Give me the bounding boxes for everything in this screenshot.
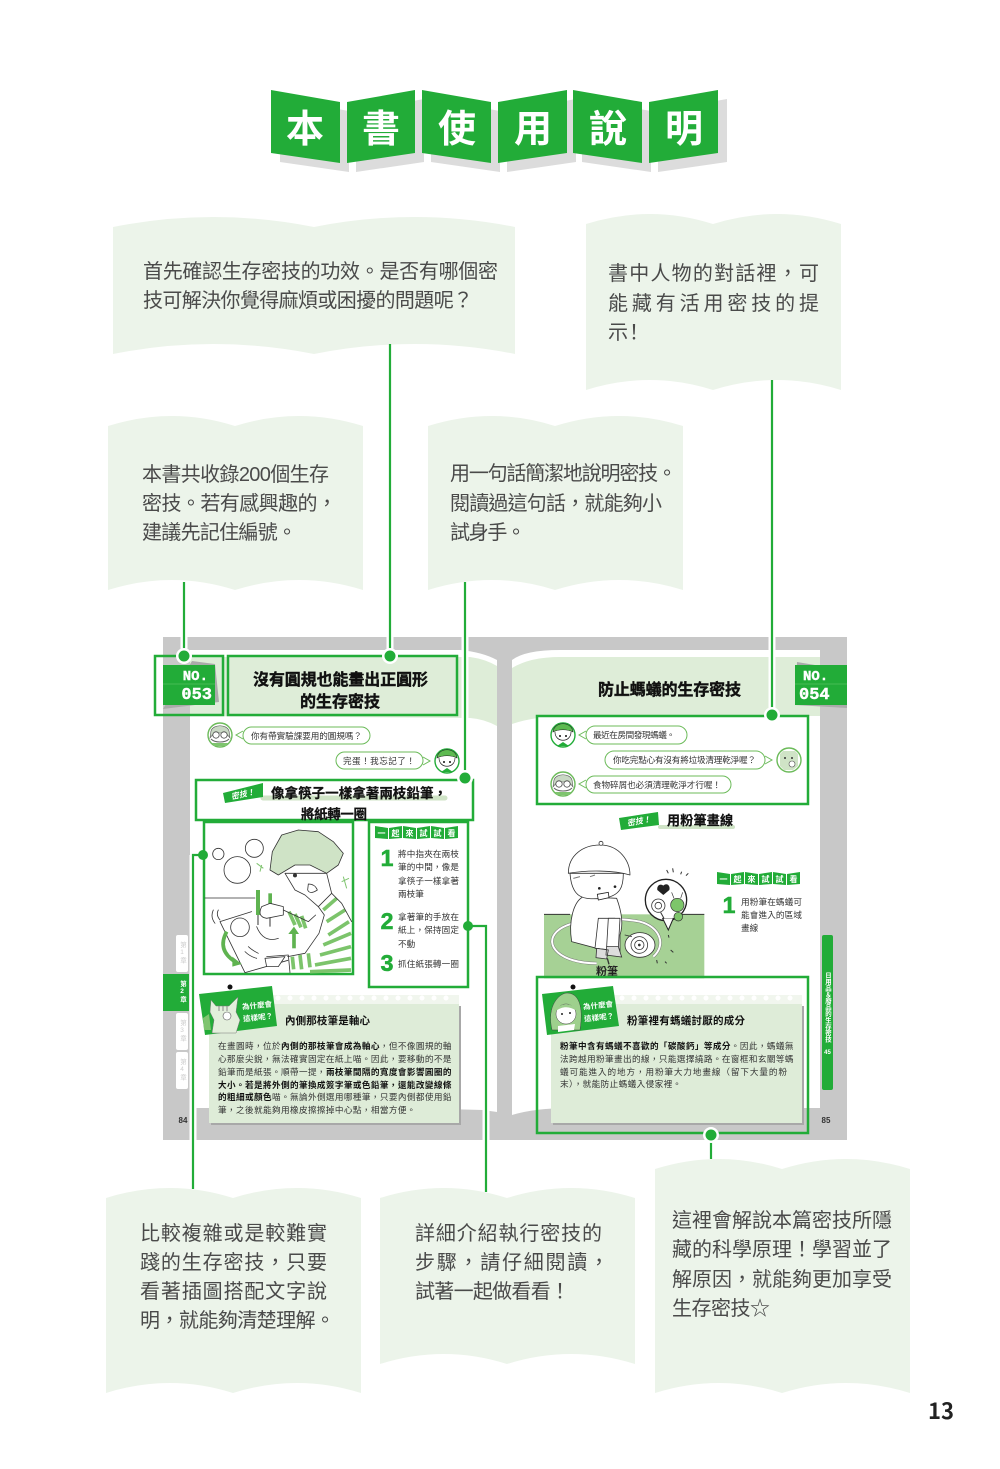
banner: try it together — [375, 826, 458, 839]
banner: try it together — [717, 872, 800, 885]
callout: illustrations explain difficult techniques: 看著插圖搭配文字說 — [140, 1280, 327, 1303]
avatar: professor — [551, 772, 575, 796]
note panel: left why: 內側那枝筆是軸心 — [285, 1014, 370, 1027]
callout: dialogue hints: 能藏有活用密技的提 — [608, 292, 819, 315]
speech bubble: 食物碎屑也必須清理乾淨才行喔！ — [593, 779, 721, 790]
side tab: right: 日用品＆廢品的生存密技 — [824, 972, 831, 1044]
callout: scientific principle: 生存密技☆ — [672, 1297, 770, 1320]
connector lines with dots — [176, 344, 780, 1192]
explanation highlight box: right why — [537, 977, 808, 1133]
banner: try it together: 試 — [762, 874, 770, 884]
speech bubble — [236, 727, 370, 744]
step 1: 1 — [381, 845, 394, 871]
title: 本書使用說明: 書 — [362, 109, 400, 151]
note panel: left why: 鉛筆而是紙張。順帶一提，兩枝筆間隔的寬度會影響圓圈的 — [218, 1066, 452, 1077]
steps: right: 能會進入的區域 — [741, 909, 802, 920]
chapter tabs: 第2章 — [178, 979, 187, 1004]
tag with girl: 為什麼會 — [583, 998, 614, 1012]
callout: 200 techniques numbering — [108, 416, 363, 590]
tag with cat — [199, 984, 277, 1035]
note panel: left why: 大小。若是將外側的筆換成簽字筆或色鉛筆，還能改變線條 — [218, 1079, 452, 1090]
left page number tag 053: NO. — [183, 669, 208, 685]
note panel: left why: 心那麼尖銳，無法確實固定在紙上喵。因此，要移動的不是 — [218, 1053, 452, 1064]
title: 本書使用說明 — [271, 90, 727, 172]
left page dialogue — [208, 723, 459, 773]
title: 本書使用說明: 說 — [589, 109, 627, 151]
step 2 — [381, 908, 459, 949]
step 3: 抓住紙張轉一圈 — [398, 958, 459, 969]
callout: scientific principle: 解原因，就能夠更加享受 — [672, 1268, 892, 1291]
chapter tabs: 第3章 — [178, 1018, 187, 1042]
callout: illustrations explain difficult techniques: 明，就能夠清楚理解。 — [140, 1309, 335, 1332]
title: 本書使用說明: 用 — [514, 109, 552, 151]
page number 13: 13 — [928, 1394, 954, 1426]
right page — [512, 650, 820, 1115]
connector: illustration — [193, 850, 208, 1189]
left page number tag 053: 053 — [181, 686, 212, 705]
banner: try it together: 來 — [748, 874, 756, 884]
callout: dialogue hints: 書中人物的對話裡，可 — [608, 262, 819, 285]
right technique headline — [619, 812, 733, 830]
illustration: drawing a circle with two pencils — [204, 822, 353, 974]
explanation highlight box: right why: 蟻可能進入的地方，用粉筆大力地畫線（留下大量的粉 — [560, 1066, 788, 1077]
speech bubble: 你吃完點心有沒有將垃圾清理乾淨喔？ — [613, 754, 756, 765]
open book spread — [155, 637, 847, 1140]
speech bubble — [605, 751, 772, 769]
callout: detailed steps: 詳細介紹執行密技的 — [415, 1222, 602, 1245]
tag with cat: 這樣呢？ — [243, 1010, 273, 1024]
connector: explanation — [703, 1127, 719, 1159]
note panel: left why: 在畫圓時，位於內側的那枝筆會成為軸心，但不像圓規的軸 — [218, 1040, 452, 1051]
callout: one-sentence summary: 閱讀過這句話，就能夠小 — [450, 492, 662, 515]
explanation highlight box: right why: 粉筆裡有螞蟻討厭的成分 — [627, 1014, 746, 1027]
callout: illustrations explain difficult techniques — [106, 1188, 361, 1393]
steps: right: 1 — [723, 892, 736, 918]
steps: right — [717, 872, 802, 933]
speech bubble: 最近在房間發現螞蟻。 — [593, 729, 675, 740]
steps: right: 畫線 — [741, 922, 759, 933]
step 3 — [381, 950, 459, 976]
chapter tabs: 第1章 — [178, 940, 187, 964]
callout: scientific principle: 藏的科學原理！學習並了 — [672, 1238, 892, 1261]
callout: check the effect of the technique — [113, 217, 515, 354]
step 1: 拿筷子一樣拿著 — [398, 875, 459, 886]
connector: dialogue — [764, 380, 780, 723]
callout: illustrations explain difficult techniques: 比較複雜或是較難實 — [140, 1222, 327, 1245]
banner: try it together: 看 — [448, 828, 456, 838]
speech bubble: 完蛋！我忘記了！ — [343, 755, 415, 766]
explanation highlight box: right why: 粉筆中含有螞蟻不喜歡的「碳酸鈣」等成分。因此，螞蟻無 — [560, 1040, 794, 1051]
technique headline box: 密技！ — [230, 788, 256, 801]
left page title box: 的生存密技 — [300, 692, 380, 711]
technique headline box: 像拿筷子一樣拿著兩枝鉛筆， — [271, 785, 447, 801]
callout: scientific principle: 這裡會解說本篇密技所隱 — [672, 1209, 892, 1232]
right page dialogue box — [537, 716, 808, 804]
left page number tag 053 — [163, 661, 219, 709]
avatar: boy — [435, 749, 459, 773]
left page title box — [228, 656, 457, 715]
callout: one-sentence summary — [428, 416, 683, 590]
side tab: right: 45 — [824, 1050, 831, 1056]
avatar: professor — [208, 723, 232, 747]
callout: detailed steps: 步驟，請仔細閱讀， — [415, 1251, 609, 1274]
left page — [190, 650, 497, 1112]
step 2: 拿著筆的手放在 — [398, 911, 459, 922]
callout: scientific principle — [655, 1159, 910, 1393]
connector: effect title — [382, 344, 398, 664]
note panel: left why — [199, 984, 461, 1125]
banner: try it together: 試 — [776, 874, 784, 884]
speech bubble: 你有帶實驗課要用的圓規嗎？ — [251, 730, 362, 741]
note panel: left why: 的粗細或顏色喵。無論外側選用哪種筆，只要內側都使用鉛 — [218, 1091, 452, 1102]
chapter tabs: 第4章 — [178, 1057, 187, 1082]
step 2: 紙上，保持固定 — [398, 924, 459, 935]
chapter tabs — [163, 935, 189, 1089]
highlight box: number — [155, 656, 223, 715]
callout: 200 techniques numbering: 密技。若有感興趣的， — [142, 492, 337, 515]
banner: try it together: 看 — [790, 874, 798, 884]
right technique headline: 用粉筆畫線 — [667, 813, 733, 828]
technique headline box — [196, 780, 473, 822]
step 1: 將中指夾在兩枝 — [398, 848, 459, 859]
callout: check the effect of the technique: 首先確認生存密技的功效。是否有哪個密 — [143, 260, 498, 283]
explanation highlight box: right why: 法跨越用粉筆畫出的線，只能選擇繞路。在窗框和玄關等螞 — [560, 1053, 794, 1064]
banner: try it together: 一 — [720, 875, 728, 884]
step 1: 兩枝筆 — [398, 888, 424, 899]
avatar: boy — [551, 723, 575, 747]
speech bubble — [579, 726, 687, 744]
banner: try it together: 一 — [378, 829, 386, 838]
callout: 200 techniques numbering: 建議先記住編號。 — [142, 521, 297, 544]
page number 85: 85 — [822, 1116, 831, 1125]
illustration: boy drawing a chalk line — [544, 841, 704, 978]
step 3: 3 — [381, 950, 393, 976]
right technique headline: 密技！ — [626, 815, 652, 828]
banner: try it together: 試 — [434, 828, 442, 838]
connector: number — [176, 582, 192, 664]
book base — [163, 637, 847, 1140]
right page title: 防止螞蟻的生存密技 — [598, 680, 741, 699]
side tab: right — [822, 935, 833, 1090]
connector: summary — [457, 582, 473, 786]
avatar: cat — [777, 748, 801, 772]
technique headline box: 將紙轉一圈 — [301, 806, 367, 822]
tag with cat: 為什麼會 — [242, 998, 273, 1012]
left page title box: 沒有圓規也能畫出正圓形 — [253, 670, 428, 689]
banner: try it together: 起 — [734, 874, 742, 884]
callout: dialogue hints — [586, 214, 841, 390]
speech bubble — [336, 752, 430, 769]
callout: dialogue hints: 示！ — [608, 322, 644, 344]
title: 本書使用說明: 使 — [438, 109, 476, 151]
callout: detailed steps — [380, 1188, 635, 1364]
speech bubble — [579, 776, 731, 793]
explanation highlight box: right why: 末），就能防止螞蟻入侵家裡。 — [560, 1078, 682, 1089]
callout: 200 techniques numbering: 本書共收錄200個生存 — [142, 463, 329, 486]
right page number tag 054: 054 — [799, 686, 830, 705]
title: 本書使用說明: 本 — [286, 109, 324, 151]
callout: one-sentence summary: 試身手。 — [450, 521, 526, 544]
illustration: boy drawing a chalk line: 粉筆 — [596, 964, 618, 978]
right page number tag 054 — [795, 662, 847, 708]
callout: illustrations explain difficult techniques: 踐的生存密技，只要 — [140, 1251, 327, 1274]
steps: right: 用粉筆在螞蟻可 — [741, 896, 802, 907]
tag with girl: 這樣呢？ — [584, 1010, 614, 1024]
tag with girl — [542, 984, 619, 1035]
page number 84: 84 — [179, 1116, 188, 1125]
callout: one-sentence summary: 用一句話簡潔地說明密技。 — [450, 462, 677, 485]
banner: try it together: 起 — [392, 828, 400, 838]
callout: check the effect of the technique: 技可解決你覺得麻煩或困擾的問題呢？ — [143, 289, 473, 312]
left page header band — [190, 657, 497, 726]
right page header band — [512, 657, 820, 724]
connector: steps — [463, 921, 486, 1192]
banner: try it together: 試 — [420, 828, 428, 838]
title: 本書使用說明: 明 — [665, 109, 703, 151]
right page number tag 054: NO. — [803, 669, 828, 685]
note panel: left why: 筆，之後就能夠用橡皮擦擦掉中心點，相當方便。 — [218, 1104, 416, 1115]
step 2: 不動 — [398, 939, 416, 949]
step 2: 2 — [381, 908, 393, 934]
step 1 — [381, 845, 459, 899]
banner: try it together: 來 — [406, 828, 414, 838]
steps box: left — [369, 822, 468, 987]
callout: detailed steps: 試著一起做看看！ — [415, 1280, 570, 1303]
step 1: 筆的中間，像是 — [398, 861, 459, 872]
